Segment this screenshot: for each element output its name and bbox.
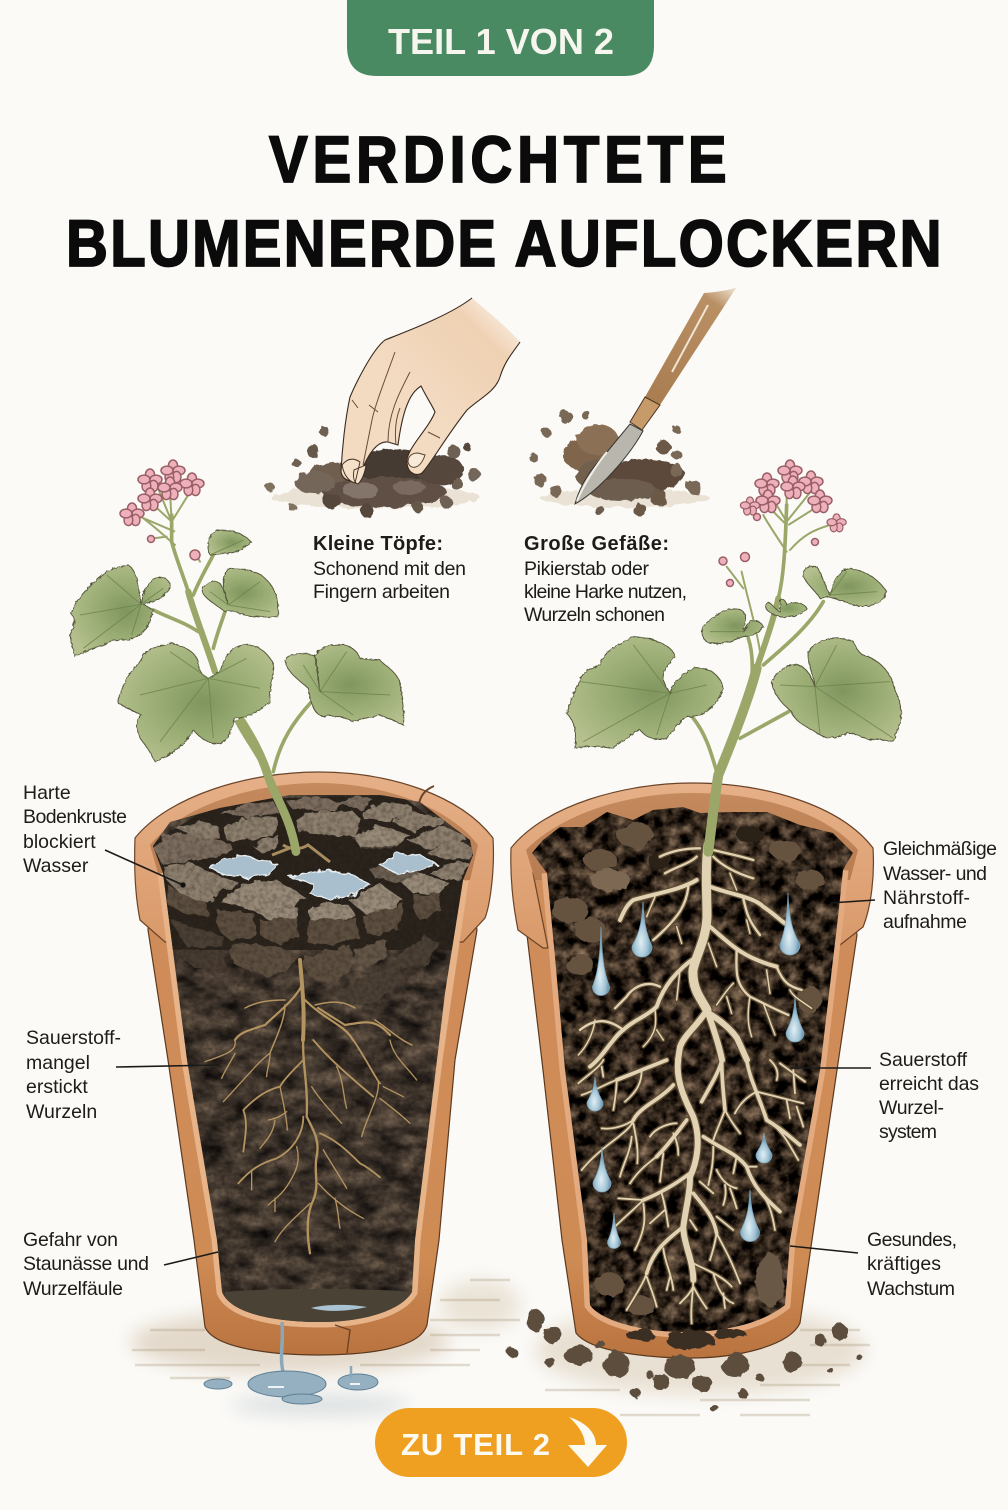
speckle overlay xyxy=(156,795,472,1320)
leaf veins xyxy=(80,540,390,742)
title: VERDICHTETE xyxy=(269,124,727,197)
stunted roots xyxy=(205,960,417,1253)
illustration: dibber in soil xyxy=(530,288,736,516)
button: Zu Teil 2 xyxy=(375,1408,627,1477)
button: Zu Teil 2: ZU TEIL 2 xyxy=(401,1427,550,1462)
callout: Gleichmaessige Aufnahme: Gleichmäßige xyxy=(883,838,997,860)
leaves xyxy=(70,530,404,762)
loose soil xyxy=(525,800,860,1340)
callout: Gesundes Wachstum xyxy=(790,1229,957,1300)
water drops xyxy=(587,893,804,1249)
soil pile under hand xyxy=(266,426,480,518)
callout: Sauerstoff erreicht: erreicht das xyxy=(879,1073,979,1095)
callout: Sauerstoff erreicht xyxy=(790,1049,979,1143)
text: large containers: Wurzeln schonen xyxy=(524,604,665,626)
upper roots xyxy=(693,845,708,1010)
callout: Staunaesse xyxy=(23,1229,218,1300)
callout: Sauerstoffmangel: erstickt xyxy=(26,1076,88,1098)
text: small pots xyxy=(313,533,466,603)
pot floor xyxy=(222,1289,412,1322)
badge: Teil 1 von 2: TEIL 1 VON 2 xyxy=(388,21,614,62)
text: large containers: Große Gefäße: xyxy=(524,533,669,555)
callout: Gleichmaessige Aufnahme: aufnahme xyxy=(883,911,967,933)
crust plates and clods xyxy=(153,795,473,1007)
soil pile around tool xyxy=(530,410,710,516)
text: small pots: Kleine Töpfe: xyxy=(313,533,443,555)
scattered soil xyxy=(507,1309,863,1411)
callout: Gesundes Wachstum: kräftiges xyxy=(867,1253,941,1275)
right plant xyxy=(567,460,901,852)
leaf veins xyxy=(580,572,893,742)
drip from crack xyxy=(281,1322,285,1378)
hand xyxy=(341,298,520,483)
pot rim xyxy=(511,783,873,948)
pot body xyxy=(527,870,857,1358)
cut wall highlight xyxy=(547,870,843,1332)
text: small pots: Fingern arbeiten xyxy=(313,581,450,603)
stems xyxy=(143,515,312,852)
left pot xyxy=(135,772,493,1378)
title xyxy=(66,124,942,281)
crack in pot base xyxy=(335,1325,350,1353)
flower cluster xyxy=(719,460,846,586)
crack in rim xyxy=(418,786,434,808)
text: large containers xyxy=(524,533,687,626)
callout: Staunaesse: Staunässe und xyxy=(23,1253,149,1275)
healthy roots xyxy=(578,845,812,1323)
ferrule xyxy=(630,397,660,430)
callout: Harte Bodenkruste xyxy=(23,782,186,888)
compacted soil xyxy=(153,795,473,1322)
text: large containers: Pikierstab oder xyxy=(524,558,650,580)
callout: Harte Bodenkruste: Bodenkruste xyxy=(23,806,127,828)
pot rim xyxy=(135,772,493,942)
callout: Sauerstoff erreicht: system xyxy=(879,1121,937,1143)
callout: Gleichmaessige Aufnahme: Nährstoff- xyxy=(883,887,970,909)
puddles on crust xyxy=(208,853,437,900)
leaves xyxy=(567,566,901,748)
text: small pots: Schonend mit den xyxy=(313,558,466,580)
left plant xyxy=(70,460,404,852)
cut wall highlight xyxy=(163,873,463,1322)
callout: Gleichmaessige Aufnahme: Wasser- und xyxy=(883,863,987,885)
top dark base xyxy=(150,795,475,950)
right pot xyxy=(507,783,873,1411)
callout: Staunaesse: Gefahr von xyxy=(23,1229,118,1251)
callout: Harte Bodenkruste: blockiert xyxy=(23,831,96,853)
ground stains xyxy=(130,1280,870,1415)
finger tips xyxy=(342,459,366,484)
callout: Staunaesse: Wurzelfäule xyxy=(23,1278,123,1300)
callout: Sauerstoffmangel xyxy=(26,1027,218,1123)
callout: Harte Bodenkruste: Wasser xyxy=(23,855,89,877)
callout: Gleichmaessige Aufnahme xyxy=(830,838,997,933)
pot inner wall xyxy=(526,793,858,880)
stems xyxy=(693,505,830,852)
icon: curved arrow xyxy=(568,1417,607,1467)
title: BLUMENERDE AUFLOCKERN xyxy=(66,208,942,281)
callout: Gesundes Wachstum: Gesundes, xyxy=(867,1229,957,1251)
stem base on crust xyxy=(272,845,330,862)
flower cluster xyxy=(120,460,204,560)
text: large containers: kleine Harke nutzen, xyxy=(524,581,687,603)
illustration: hand loosening soil xyxy=(266,298,520,518)
pot body xyxy=(148,873,477,1355)
lower roots xyxy=(578,1060,805,1323)
soil spilling through base xyxy=(626,1328,746,1350)
badge: Teil 1 von 2 xyxy=(347,0,654,76)
pot inner wall xyxy=(150,783,478,880)
callout: Sauerstoffmangel: Sauerstoff- xyxy=(26,1027,121,1049)
wooden handle xyxy=(645,288,736,405)
callout: Sauerstoffmangel: Wurzeln xyxy=(26,1101,97,1123)
callout: Sauerstoffmangel: mangel xyxy=(26,1052,90,1074)
callout: Sauerstoff erreicht: Sauerstoff xyxy=(879,1049,968,1071)
soil clods xyxy=(552,822,824,1315)
callout: Harte Bodenkruste: Harte xyxy=(23,782,71,804)
blade xyxy=(575,424,643,504)
water puddles below left pot xyxy=(204,1366,378,1404)
callout: Gesundes Wachstum: Wachstum xyxy=(867,1278,955,1300)
callout: Sauerstoff erreicht: Wurzel- xyxy=(879,1097,944,1119)
